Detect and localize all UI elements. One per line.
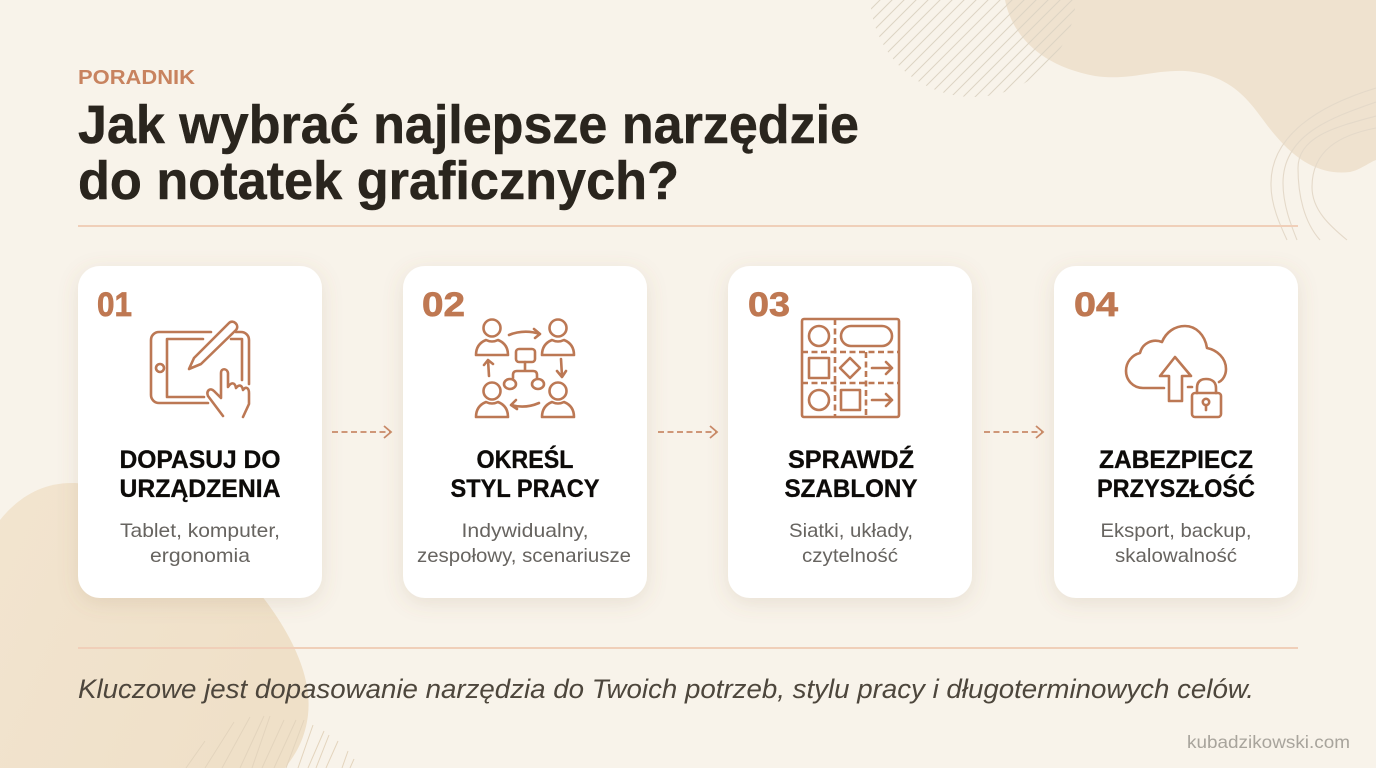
panel: step 03 <box>728 266 972 598</box>
description: Eksport, backup, <box>1100 520 1252 542</box>
number 02: 02 <box>422 286 465 324</box>
description: Siatki, układy, <box>789 520 913 542</box>
panel: step 02 <box>403 266 647 598</box>
arrow 1 to 2 <box>332 426 391 438</box>
panel: step 04 <box>1054 266 1298 598</box>
number 01: 01 <box>97 286 132 324</box>
heading: SPRAWDŹ <box>788 445 914 474</box>
icon: tablet with pen and hand <box>151 322 249 417</box>
icon: template grid <box>802 319 899 417</box>
decorative blob bottom left <box>0 483 309 768</box>
title <box>78 95 859 211</box>
heading: DOPASUJ DO <box>120 446 280 474</box>
panel: step 02: zespołowy, scenariusze <box>417 545 631 567</box>
heading: ZABEZPIECZ <box>1099 446 1253 474</box>
description: Tablet, komputer, <box>120 520 280 542</box>
decorative contour lines <box>1271 88 1376 240</box>
number 03: 03 <box>748 286 790 324</box>
panel: step 03: SZABLONY <box>784 475 918 503</box>
panel: step 02: STYL PRACY <box>450 475 600 503</box>
decorative hatch top <box>871 0 1075 97</box>
eyebrow: PORADNIK <box>78 66 195 89</box>
decorative blob top right <box>1005 0 1376 173</box>
panel: step 04: PRZYSZŁOŚĆ <box>1097 473 1255 503</box>
closing statement: Kluczowe jest dopasowanie narzędzia do Twoich potrzeb, stylu pracy i długoterminowych celów. <box>78 674 1254 704</box>
decorative hatch bottom <box>186 716 354 768</box>
arrow 3 to 4 <box>984 426 1043 438</box>
arrow 2 to 3 <box>658 426 717 438</box>
title: do notatek graficznych? <box>78 151 679 211</box>
icon: cloud upload with lock <box>1126 326 1226 417</box>
panel: step 03: czytelność <box>802 545 898 567</box>
number 04: 04 <box>1074 286 1118 324</box>
panel: step 01 <box>78 266 322 598</box>
title: Jak wybrać najlepsze narzędzie <box>78 95 859 155</box>
website credit: kubadzikowski.com <box>1187 732 1350 752</box>
panel: step 04: skalowalność <box>1115 545 1237 567</box>
heading: OKREŚL <box>476 444 574 474</box>
panel: step 01: URZĄDZENIA <box>120 475 280 503</box>
description: Indywidualny, <box>462 520 588 542</box>
icon: team with flowchart <box>476 320 574 417</box>
panel: step 01: ergonomia <box>150 545 250 567</box>
